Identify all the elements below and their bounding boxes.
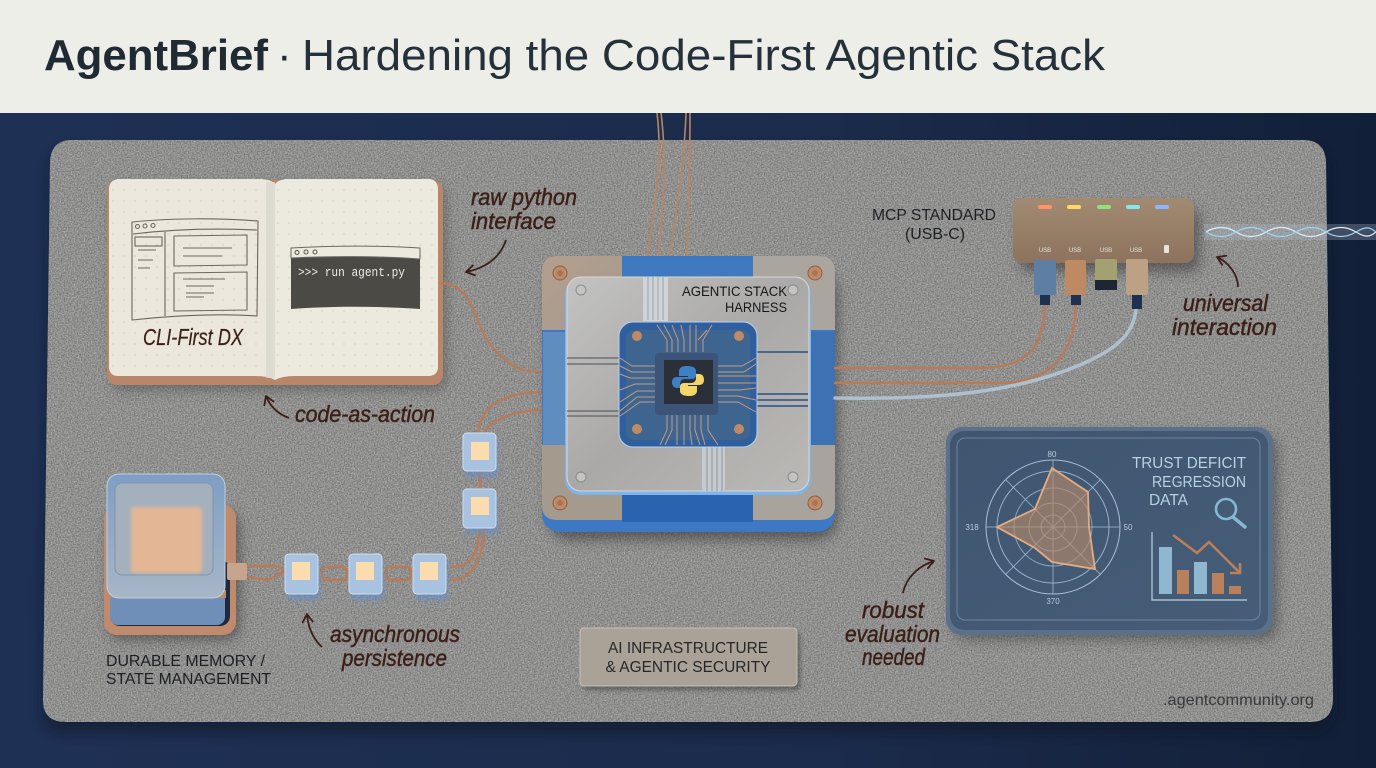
annotation: code-as-action: code-as-action [295,401,435,427]
radar chart: 50 [1124,523,1133,532]
annotation: raw python interface: raw python [471,184,577,210]
connector [227,563,247,580]
glowing cube [463,433,498,477]
glass inner frame [115,483,213,575]
annotation: raw python interface: interface [471,208,556,234]
label: durable memory: DURABLE MEMORY / [106,653,266,670]
bar chart [1152,532,1247,600]
annotation: code-as-action [266,396,435,427]
title: Hardening the Code-First Agentic Stack [302,31,1106,80]
wireframe sketch [132,219,258,320]
persistence chain [247,433,498,600]
harness steel plate [565,277,811,495]
terminal sketch [291,246,420,309]
panel: agentic stack harness [542,256,838,540]
panel: MCP hub [1013,198,1376,309]
port labels: USB [1100,248,1112,254]
copper wires: notebook and memory chain to harness [440,283,545,490]
terminal sketch: >>> run agent.py [298,266,405,280]
label: MCP standard: (USB-C) [905,226,965,243]
chip window [619,322,757,447]
icon: magnifier [1216,499,1245,527]
label: durable memory: STATE MANAGEMENT [106,671,271,688]
tablet heading: TRUST DEFICIT [1132,455,1246,472]
notebook pages [109,179,438,380]
tablet heading: DATA [1149,492,1188,509]
plaque: AI infrastructure: AI INFRASTRUCTURE [608,640,768,657]
tablet heading: REGRESSION [1152,474,1246,491]
radar chart: 80 [1048,450,1057,459]
port labels: USB [1039,248,1051,254]
panel: CLI-first notebook [107,179,446,390]
label: durable memory [106,653,271,688]
panel: durable memory stack [104,474,247,640]
annotation: robust evaluation needed: needed [862,644,926,670]
plaque: AI infrastructure [580,628,800,690]
copper wires from top into harness [647,113,690,262]
status LEDs [1038,205,1169,209]
hub body [1013,198,1194,263]
radar chart [965,450,1133,606]
harness label: HARNESS [725,299,787,315]
annotation: universal interaction: universal [1183,290,1269,316]
port labels: USB [1130,248,1142,254]
glowing cube [285,554,320,600]
label: MCP standard: MCP STANDARD [872,207,996,224]
label: MCP standard [872,207,996,243]
stacked layers [109,560,230,626]
annotation: asynchronous persistence: asynchronous [330,621,460,647]
annotation: asynchronous persistence: persistence [341,645,447,671]
annotation: universal interaction [1172,257,1277,340]
harness label [682,283,788,315]
plaque: AI infrastructure: & AGENTIC SECURITY [606,659,771,676]
harness blue base [542,256,835,532]
glowing cube [413,554,448,600]
radar chart: 318 [965,523,979,532]
chip with python logo [655,353,718,415]
title: · [277,31,292,80]
harness label: AGENTIC STACK [682,283,788,299]
annotation: universal interaction: interaction [1172,314,1277,340]
harness corner plates [542,256,835,520]
glowing cube [349,554,384,600]
felt desk mat [43,140,1333,732]
DNA ribbon [1204,224,1376,240]
panel: trust deficit tablet [946,427,1278,640]
copper base tray [104,505,236,635]
glowing cube [463,489,498,534]
radar chart: 370 [1046,597,1060,606]
annotation: robust evaluation needed: robust [862,597,926,623]
copper and fibre cables: harness to MCP hub [835,295,1137,398]
annotation: raw python interface [466,184,577,272]
footer url: .agentcommunity.org [1163,692,1314,709]
annotation: robust evaluation needed: evaluation [845,621,940,647]
chain links [247,472,484,580]
peach memory core [131,507,202,573]
annotation: robust evaluation needed [845,561,940,670]
port labels: USB [1069,248,1081,254]
header band [0,0,1376,113]
title: AgentBrief [44,31,268,80]
notebook caption: CLI-First DX [143,324,244,350]
port labels [1039,245,1169,254]
tablet heading [1132,455,1246,509]
annotation: asynchronous persistence [307,614,460,671]
glass block [107,474,225,598]
USB plugs [1034,259,1148,309]
